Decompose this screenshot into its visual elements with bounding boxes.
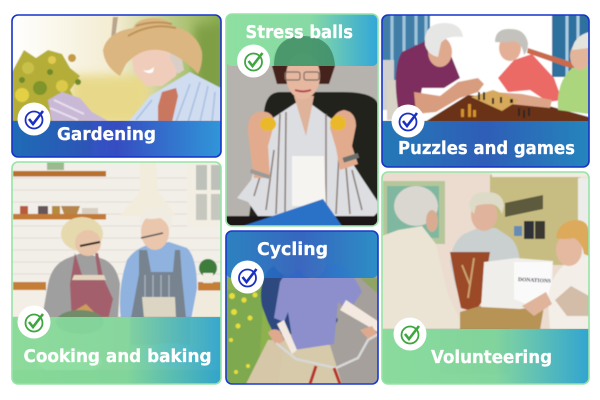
photo: couple cycling: [226, 231, 382, 384]
card border: [382, 15, 589, 167]
photo: woman gardening: [12, 15, 225, 157]
panel: stress balls: [226, 14, 378, 226]
photo: seniors sorting donations: [382, 172, 589, 384]
icon: check badge: [237, 44, 270, 78]
icon: check badge: [18, 306, 50, 338]
label: Cycling: [257, 239, 328, 260]
panel: puzzles and games: [382, 15, 590, 167]
panel: cycling: [226, 231, 382, 384]
label band: [12, 317, 221, 384]
label: Volunteering: [431, 347, 552, 368]
label band: [226, 231, 378, 278]
icon: check badge: [392, 104, 424, 138]
panel: volunteering: [382, 172, 589, 384]
card border: [12, 162, 221, 384]
label: Puzzles and games: [398, 138, 575, 159]
icon: check badge: [18, 102, 50, 136]
label band: [12, 121, 221, 157]
photo: seniors playing chess: [382, 15, 590, 167]
panel: cooking and baking: [12, 162, 221, 384]
icon: check badge: [231, 260, 264, 294]
photo: couple cooking: [12, 162, 221, 384]
icon: check badge: [394, 318, 426, 350]
photo: seniors sorting donations: DONATIONS: [518, 277, 551, 285]
label band: [382, 121, 589, 167]
panel: gardening: [12, 15, 225, 157]
card border: [12, 15, 221, 157]
card border: [226, 14, 378, 226]
label: Gardening: [57, 124, 156, 145]
label band: [382, 329, 589, 384]
label: Cooking and baking: [24, 346, 212, 367]
label band: [226, 14, 378, 66]
card border: [226, 231, 378, 384]
photo: woman with stress balls: [226, 45, 378, 226]
label: Stress balls: [246, 22, 353, 43]
hair through band: [274, 36, 335, 66]
card border: [382, 172, 589, 384]
